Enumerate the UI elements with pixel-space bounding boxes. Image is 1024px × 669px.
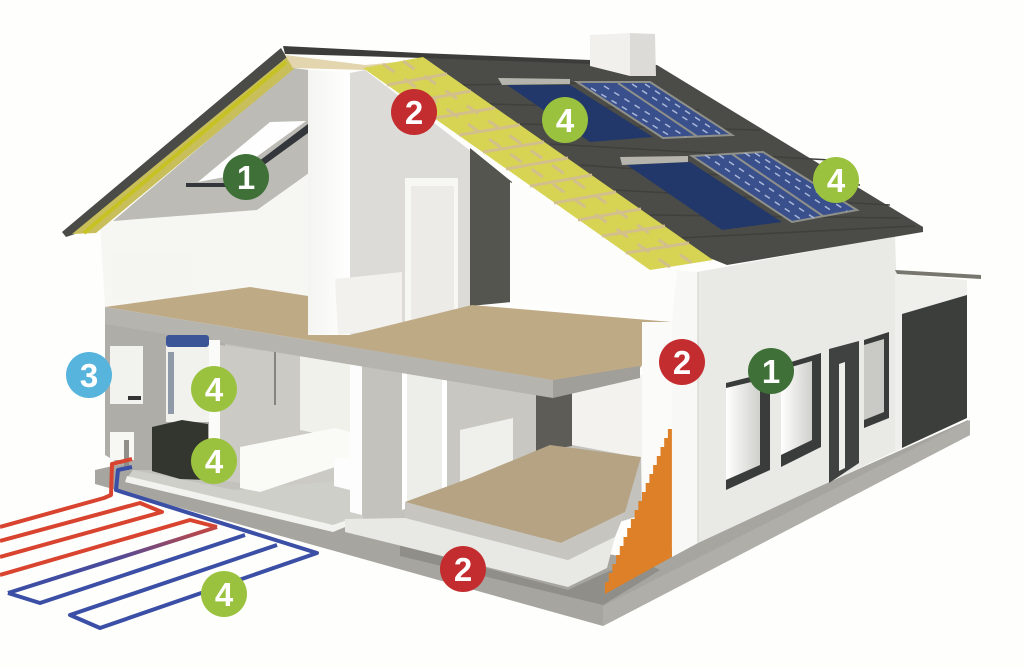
brick wall section xyxy=(605,429,672,594)
badge: 4 ground collector xyxy=(201,571,247,617)
bathroom xyxy=(240,352,350,492)
badge: 4 storage cylinder xyxy=(191,366,237,412)
upstairs radiator xyxy=(335,272,402,335)
roof window xyxy=(186,121,308,187)
chimney xyxy=(590,33,656,76)
exterior right wall xyxy=(672,236,902,557)
badge: 3 boiler: 3 xyxy=(80,357,98,394)
basement back wall xyxy=(105,320,642,540)
ground heat collector pipes xyxy=(0,459,317,628)
living room wall xyxy=(447,376,536,496)
badge: 4 solar upper: 4 xyxy=(556,102,575,139)
badge: 4 storage cylinder: 4 xyxy=(205,371,224,408)
solar collector lower xyxy=(620,156,782,230)
column xyxy=(642,358,672,520)
floor edge xyxy=(405,502,625,560)
roof xyxy=(62,33,923,270)
main roof surface xyxy=(423,57,923,265)
badge: 4 solar upper xyxy=(542,97,588,143)
front door xyxy=(829,341,859,483)
window middle xyxy=(781,353,821,467)
front windows and door xyxy=(726,332,889,490)
yellow roof insulation xyxy=(363,57,713,270)
blue pipes xyxy=(8,467,317,628)
badge: 3 boiler xyxy=(66,352,112,398)
attic radiator xyxy=(113,251,193,299)
badge: 1 skylight xyxy=(223,154,269,200)
utility room wall xyxy=(105,320,225,470)
dark room xyxy=(470,148,512,306)
badge: 2 roof insulation xyxy=(391,89,437,135)
floor white stripe xyxy=(125,476,350,532)
utility room equipment xyxy=(110,335,220,480)
upstairs door xyxy=(405,178,458,324)
badge: 2 roof insulation: 2 xyxy=(405,94,423,131)
floor insulation xyxy=(345,518,615,587)
upper floor xyxy=(105,287,672,398)
heat pump unit xyxy=(152,420,208,480)
left gable eave xyxy=(62,48,295,237)
ground floor slab and insulation xyxy=(345,445,641,587)
cap beam xyxy=(285,55,420,70)
storage cylinder xyxy=(166,335,220,440)
white column xyxy=(308,70,350,335)
badge: 2 wall insulation xyxy=(659,339,705,385)
solar collector upper xyxy=(498,78,653,142)
badge: 4 ground collector: 4 xyxy=(215,576,234,613)
shower riser xyxy=(274,352,276,405)
window left xyxy=(726,372,770,490)
hall door xyxy=(402,370,447,510)
utility room floor xyxy=(127,470,363,527)
ground floor rooms xyxy=(105,320,672,540)
interior wall xyxy=(350,70,472,335)
photovoltaic panel lower xyxy=(692,152,857,222)
bathroom wall xyxy=(220,345,350,500)
transition pipe xyxy=(8,527,217,593)
photovoltaic panel upper xyxy=(577,82,732,138)
dividing wall xyxy=(362,365,402,522)
small wall box xyxy=(110,432,134,470)
badge: 1 skylight: 1 xyxy=(237,159,255,196)
badge: 4 solar lower xyxy=(813,157,859,203)
house cutaway illustration xyxy=(62,33,981,626)
garage xyxy=(895,270,981,452)
badge: 4 heat pump: 4 xyxy=(205,443,224,480)
badge: 2 floor insulation xyxy=(440,546,486,592)
attic wall xyxy=(100,173,309,307)
right white wall xyxy=(510,182,677,322)
foundation slab xyxy=(95,420,970,626)
shingle lines xyxy=(460,82,915,238)
bathtub xyxy=(240,428,350,492)
lower floor xyxy=(405,445,641,543)
badge: 1 front windows: 1 xyxy=(762,353,780,390)
badge: 2 floor insulation: 2 xyxy=(454,551,472,588)
sloped ceiling xyxy=(100,68,309,232)
window right xyxy=(864,332,889,428)
living room radiator xyxy=(460,418,513,483)
badge: 1 front windows xyxy=(748,348,794,394)
ridge xyxy=(283,46,590,64)
floor slab edge xyxy=(105,307,553,398)
upper storey xyxy=(100,68,677,335)
badge: 4 heat pump xyxy=(191,438,237,484)
badge: 2 wall insulation: 2 xyxy=(673,344,691,381)
red pipes xyxy=(0,459,217,575)
wall boiler xyxy=(110,346,143,404)
badge: 4 solar lower: 4 xyxy=(827,162,846,199)
